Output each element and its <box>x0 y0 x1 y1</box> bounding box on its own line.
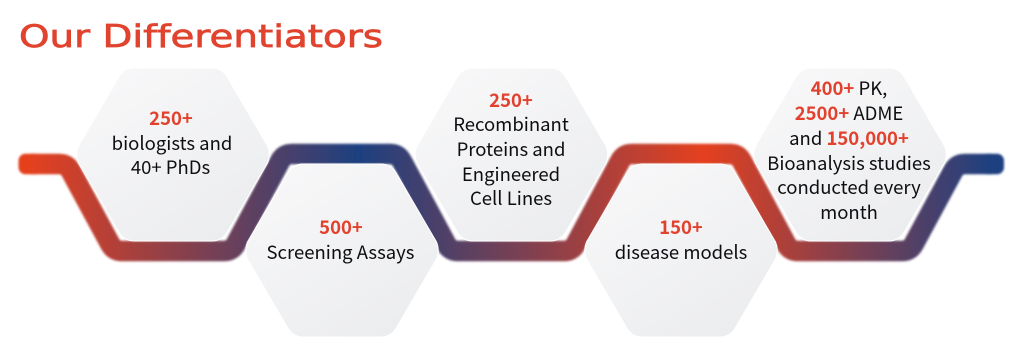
panel: 250+ biologists: biologists and <box>112 130 232 156</box>
panel: PK ADME bioanalysis studies: 400+ PK, <box>811 75 887 101</box>
panel: 250+ recombinant proteins: Engineered <box>462 161 560 187</box>
panel: 250+ recombinant proteins: Proteins and <box>457 136 565 162</box>
panel: 150+ disease models <box>585 164 777 337</box>
panel: 500+ screening assays: 500+ <box>319 214 363 240</box>
panel: PK ADME bioanalysis studies: and 150,000+ <box>789 125 909 151</box>
panel: 250+ biologists <box>77 68 269 241</box>
panel: 500+ screening assays: Screening Assays <box>267 239 414 265</box>
panel: 250+ recombinant proteins: Recombinant <box>453 111 569 137</box>
panel: 150+ disease models: 150+ <box>659 214 703 240</box>
title: Our Differentiators <box>19 19 383 55</box>
panel: PK ADME bioanalysis studies: 2500+ ADME <box>795 100 903 126</box>
panel: 250+ recombinant proteins: 250+ <box>489 87 533 113</box>
wave ribbon connector <box>18 154 1004 251</box>
panel: 250+ recombinant proteins <box>415 68 608 241</box>
panel: PK ADME bioanalysis studies: Bioanalysis studies <box>767 150 931 176</box>
panel: 150+ disease models: disease models <box>615 239 747 265</box>
panel: PK ADME bioanalysis studies <box>754 68 946 241</box>
panel: PK ADME bioanalysis studies: conducted every <box>777 174 921 200</box>
panel: PK ADME bioanalysis studies: month <box>820 199 878 225</box>
panel: 250+ biologists: 40+ PhDs <box>131 154 210 180</box>
panel: 250+ biologists: 250+ <box>149 105 193 131</box>
panel: 250+ recombinant proteins: Cell Lines <box>470 185 552 211</box>
panel: 500+ screening assays <box>246 164 438 337</box>
